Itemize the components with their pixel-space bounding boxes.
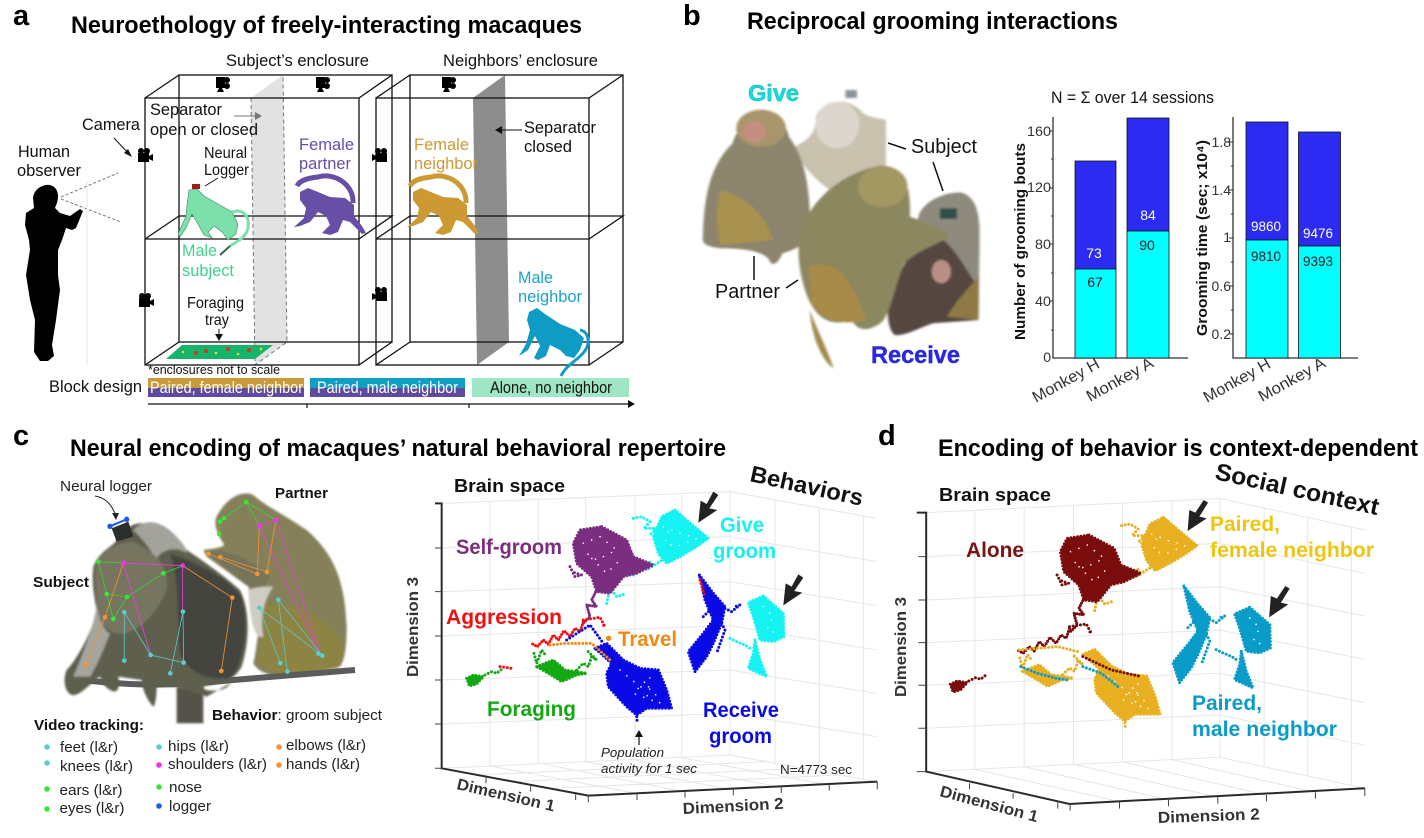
subject enclosure wireframe bbox=[145, 75, 392, 365]
sample size: N=4773 sec bbox=[780, 762, 853, 777]
axis labels: Dimension 1 bbox=[938, 783, 1040, 826]
separator open label bbox=[150, 100, 262, 139]
human observer label bbox=[17, 142, 81, 180]
video tracking legend: hips (l&r) bbox=[168, 738, 229, 755]
separator closed label: closed bbox=[524, 137, 572, 156]
female partner label: partner bbox=[299, 154, 351, 173]
heading c: Neural encoding of macaques’ natural behavioral repertoire bbox=[70, 435, 726, 462]
panel a: neuroethology setup bbox=[13, 0, 635, 408]
bar chart: grooming bouts: Monkey H bbox=[1030, 356, 1103, 406]
cluster labels: Paired, bbox=[1192, 692, 1262, 715]
foraging tray label bbox=[187, 295, 244, 341]
separator closed label: Separator bbox=[524, 118, 596, 137]
sessions note: N = Σ over 14 sessions bbox=[1051, 88, 1214, 107]
icon: female partner monkey bbox=[294, 176, 366, 235]
foraging tray label: Foraging bbox=[187, 295, 244, 312]
panel b: reciprocal grooming bbox=[683, 0, 1358, 406]
separator open label: Separator bbox=[150, 100, 222, 119]
human observer silhouette bbox=[25, 185, 83, 361]
enclosure labels bbox=[226, 51, 598, 70]
bar chart: grooming bouts: Number of grooming bouts bbox=[1012, 143, 1029, 340]
bar chart: grooming time: 9393 bbox=[1303, 253, 1333, 269]
cluster labels: Aggression bbox=[446, 606, 562, 629]
heading d: Encoding of behavior is context-dependent bbox=[938, 435, 1418, 462]
cluster labels: Foraging bbox=[487, 698, 576, 721]
bar chart: grooming bouts: 84 bbox=[1140, 207, 1156, 223]
separator open or closed panel bbox=[251, 75, 287, 365]
neural logger callout: Neural logger bbox=[60, 478, 152, 495]
axis labels: Dimension 3 bbox=[893, 597, 910, 697]
neural logger label: Logger bbox=[204, 162, 250, 179]
enclosure labels: Subject’s enclosure bbox=[226, 51, 369, 70]
neural logger callout bbox=[60, 478, 152, 520]
scale note: *enclosures not to scale bbox=[148, 362, 280, 377]
panel letter a: a bbox=[13, 0, 30, 32]
axis labels: Dimension 3 bbox=[405, 577, 422, 677]
behavior caption: Behavior: groom subject bbox=[212, 707, 383, 724]
bar chart: grooming time: 1 bbox=[1223, 229, 1231, 245]
scatter title: Brain space bbox=[939, 485, 1051, 505]
bar chart: grooming time: 9810 bbox=[1251, 248, 1281, 264]
cluster labels: groom bbox=[713, 540, 776, 563]
cluster labels: Receive bbox=[703, 699, 779, 722]
bar chart: grooming time: 9860 bbox=[1251, 218, 1281, 234]
icon: female neighbor monkey bbox=[407, 176, 479, 235]
cluster labels: Give bbox=[720, 514, 764, 537]
population annotation bbox=[601, 730, 698, 776]
label Subject: Subject bbox=[33, 574, 89, 591]
female neighbor label bbox=[414, 135, 478, 173]
icon: male neighbor monkey bbox=[519, 308, 588, 376]
bar chart: grooming time: 1.4 bbox=[1212, 182, 1231, 198]
cluster labels: Alone bbox=[966, 539, 1024, 562]
female partner label: Female bbox=[299, 135, 354, 154]
panel letter b: b bbox=[683, 0, 701, 32]
enclosure labels: Neighbors’ enclosure bbox=[443, 51, 598, 70]
bar chart: grooming bouts: 160 bbox=[1027, 123, 1051, 139]
label Partner: Partner bbox=[275, 485, 328, 502]
label Receive: Receive bbox=[871, 342, 960, 369]
block: alone no neighbor: Alone, no neighbor bbox=[490, 378, 612, 397]
video tracking legend: ears (l&r) bbox=[60, 782, 123, 799]
3D scatter plot: behaviors bbox=[435, 492, 877, 802]
bar chart: grooming bouts: 80 bbox=[1035, 236, 1051, 252]
axis labels: Dimension 2 bbox=[682, 796, 784, 818]
cluster labels: groom bbox=[709, 725, 772, 748]
heading b: Reciprocal grooming interactions bbox=[747, 8, 1118, 35]
video tracking legend: hands (l&r) bbox=[286, 756, 360, 773]
bar chart: grooming bouts: 0 bbox=[1043, 349, 1051, 365]
label Partner bbox=[715, 256, 798, 303]
bar chart: grooming time: Monkey A bbox=[1256, 355, 1329, 405]
panel c: neural encoding bbox=[13, 420, 877, 818]
bar chart: grooming time: 0.2 bbox=[1212, 326, 1231, 342]
foraging tray bbox=[166, 345, 273, 359]
bar chart: grooming bouts bbox=[1012, 117, 1188, 406]
axis labels: Dimension 2 bbox=[1158, 806, 1260, 827]
neighbor enclosure wireframe bbox=[376, 75, 623, 365]
human observer label: observer bbox=[17, 161, 81, 180]
human observer label: Human bbox=[18, 142, 70, 161]
video tracking legend: nose bbox=[169, 779, 202, 796]
cluster labels bbox=[966, 513, 1374, 741]
neural logger label: Neural bbox=[204, 145, 247, 162]
heading a: Neuroethology of freely-interacting macaques bbox=[71, 12, 582, 39]
cluster labels: Paired, bbox=[1210, 513, 1280, 536]
male subject label bbox=[182, 241, 234, 280]
bar chart: grooming time: Grooming time (sec; x10⁴) bbox=[1194, 140, 1211, 336]
cluster labels: Self-groom bbox=[456, 536, 562, 559]
male subject label: Male bbox=[182, 241, 217, 260]
block: paired male neighbor: Paired, male neighbor bbox=[317, 378, 458, 397]
bar chart: grooming time: Monkey H bbox=[1201, 356, 1274, 406]
video tracking legend bbox=[34, 717, 366, 817]
block design label: Block design bbox=[49, 377, 142, 396]
label Give: Give bbox=[748, 80, 799, 106]
bar chart: grooming bouts: 90 bbox=[1139, 237, 1155, 253]
separator open label: open or closed bbox=[150, 120, 258, 139]
bar chart: grooming bouts: 120 bbox=[1027, 179, 1051, 195]
male neighbor label: Male bbox=[518, 268, 553, 287]
foraging tray label: tray bbox=[205, 312, 229, 329]
neural logger label bbox=[192, 145, 250, 189]
timeline arrow bbox=[148, 400, 635, 408]
label Behaviors: Behaviors bbox=[748, 460, 866, 511]
male subject label: subject bbox=[182, 261, 234, 280]
scatter title: Brain space bbox=[454, 476, 565, 496]
axis labels: Dimension 1 bbox=[455, 776, 556, 815]
axis labels bbox=[893, 597, 1260, 827]
cameras bbox=[138, 77, 456, 307]
population annotation: Population bbox=[601, 745, 664, 760]
label Subject bbox=[888, 136, 977, 191]
female neighbor label: Female bbox=[414, 135, 469, 154]
label Partner: Partner bbox=[715, 281, 780, 303]
video tracking legend: Video tracking: bbox=[34, 717, 144, 734]
video tracking legend: feet (l&r) bbox=[60, 739, 118, 756]
separator closed panel bbox=[473, 75, 509, 365]
female partner label bbox=[299, 135, 354, 173]
label Subject: Subject bbox=[911, 136, 977, 158]
bar chart: grooming bouts: 40 bbox=[1035, 293, 1051, 309]
bar chart: grooming time: 1.8 bbox=[1212, 134, 1231, 150]
sight lines bbox=[61, 173, 121, 365]
cluster labels: female neighbor bbox=[1210, 539, 1374, 562]
cluster labels: Travel bbox=[618, 628, 677, 651]
block: paired female neighbor: Paired, female neighbor bbox=[150, 378, 303, 397]
video tracking legend: knees (l&r) bbox=[60, 758, 133, 775]
icon: male subject monkey bbox=[178, 189, 248, 255]
population annotation: activity for 1 sec bbox=[601, 761, 698, 776]
bar chart: grooming bouts: Monkey A bbox=[1084, 355, 1157, 405]
panel letter d: d bbox=[878, 420, 896, 452]
camera label and arrow: Camera bbox=[82, 115, 141, 134]
photo: grooming macaques bbox=[703, 90, 979, 368]
axis labels bbox=[405, 577, 784, 818]
3D scatter plot: social context bbox=[917, 498, 1365, 811]
camera label and arrow bbox=[82, 115, 141, 157]
video tracking legend: logger bbox=[169, 798, 211, 815]
cluster labels: male neighbor bbox=[1192, 718, 1337, 741]
bar chart: grooming time: 0.6 bbox=[1212, 278, 1231, 294]
male neighbor label: neighbor bbox=[518, 287, 582, 306]
bar chart: grooming bouts: 67 bbox=[1087, 274, 1103, 290]
video tracking legend: elbows (l&r) bbox=[286, 737, 366, 754]
video tracking legend: eyes (l&r) bbox=[60, 800, 124, 817]
cluster labels bbox=[446, 514, 779, 748]
photo and pose skeleton bbox=[65, 493, 355, 723]
panel letter c: c bbox=[13, 420, 29, 452]
bar chart: grooming bouts: 73 bbox=[1086, 245, 1102, 261]
male neighbor label bbox=[518, 268, 582, 306]
label Social context: Social context bbox=[1213, 458, 1382, 521]
bar chart: grooming time bbox=[1194, 117, 1358, 406]
separator closed label bbox=[495, 118, 596, 156]
video tracking legend: shoulders (l&r) bbox=[168, 756, 267, 773]
bar chart: grooming time: 9476 bbox=[1303, 225, 1333, 241]
panel d: context dependent encoding bbox=[878, 420, 1418, 827]
female neighbor label: neighbor bbox=[414, 154, 478, 173]
